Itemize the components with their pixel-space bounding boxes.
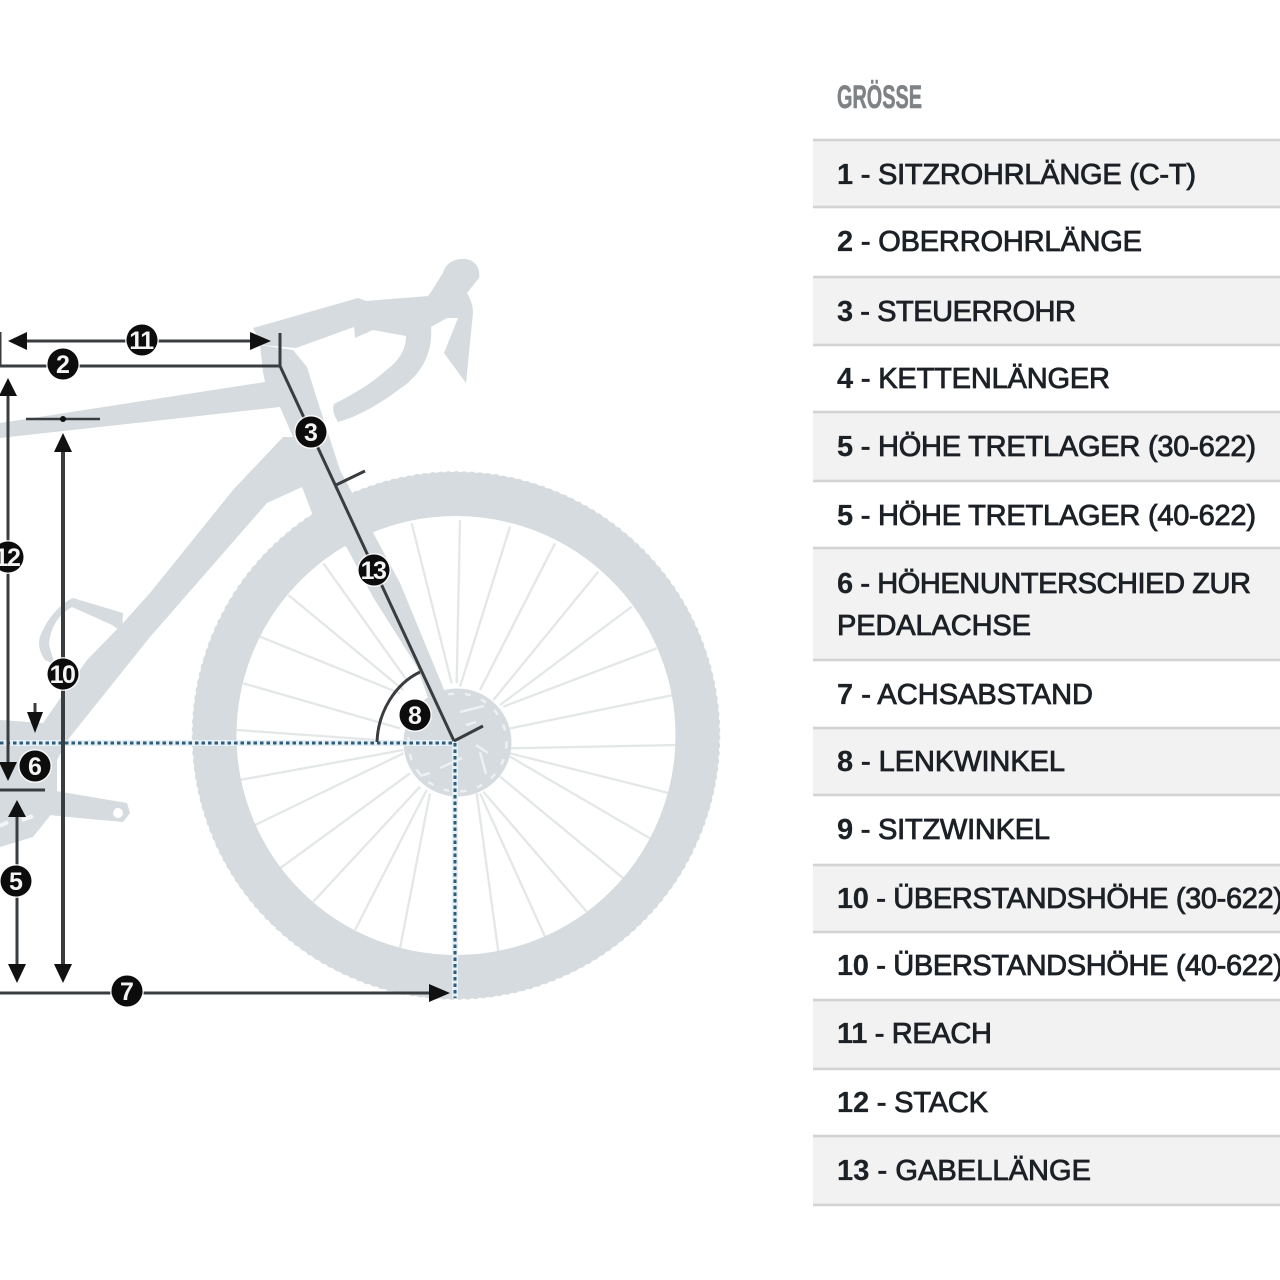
badge 13: 13 — [361, 557, 386, 585]
badge 2 — [46, 347, 80, 381]
badge 8 — [398, 698, 432, 732]
bottle cage — [39, 598, 123, 665]
dimension 11: reach — [0, 332, 280, 366]
row 4: 4 - KETTENLÄNGER — [837, 363, 1110, 395]
badge 10: 10 — [50, 661, 75, 689]
badge 6 — [18, 749, 52, 783]
row 8: 8 - LENKWINKEL — [837, 746, 1065, 778]
dotted reference lines — [0, 743, 455, 998]
badge 2: 2 — [56, 351, 70, 379]
dimension 3 and 13: head tube and fork — [280, 366, 483, 741]
badge 10 — [46, 657, 80, 691]
row 11: 11 - REACH — [837, 1018, 992, 1050]
badge 7: 7 — [120, 978, 134, 1006]
row 3: 3 - STEUERROHR — [837, 296, 1076, 328]
dimension 7: wheelbase — [0, 984, 450, 1002]
row 9: 9 - SITZWINKEL — [837, 814, 1050, 846]
badge 12 — [0, 540, 25, 574]
row 5a: 5 - HÖHE TRETLAGER (30-622) — [837, 431, 1256, 463]
row 12: 12 - STACK — [837, 1087, 989, 1119]
bike silhouette — [0, 259, 720, 999]
brake disc — [404, 688, 512, 796]
row 6 — [837, 568, 1251, 642]
table: geometry rows — [813, 139, 1280, 1206]
row 7: 7 - ACHSABSTAND — [837, 679, 1093, 711]
row 2: 2 - OBERROHRLÄNGE — [837, 226, 1142, 258]
heading: Größe: GRÖSSE — [837, 79, 922, 115]
crank and chainring — [0, 790, 130, 847]
badge 5: 5 — [9, 868, 23, 896]
handlebar — [253, 259, 479, 422]
badge 11 — [125, 323, 159, 357]
dimension 2: top tube — [0, 364, 280, 368]
badge 8: 8 — [408, 702, 422, 730]
measurement lines — [0, 332, 483, 1002]
dimension 6: arrow — [27, 703, 43, 733]
row 6: 6 - HÖHENUNTERSCHIED ZUR — [837, 568, 1251, 600]
row 5b: 5 - HÖHE TRETLAGER (40-622) — [837, 500, 1256, 532]
wheel spokes — [237, 520, 677, 952]
dimension 12: stack — [0, 378, 17, 781]
badge 11: 11 — [129, 327, 154, 355]
badge 3 — [294, 415, 328, 449]
number badges — [0, 323, 432, 1008]
row 6: PEDALACHSE — [837, 610, 1031, 642]
frame and fork — [0, 345, 458, 800]
badge 5 — [0, 864, 33, 898]
badge 6: 6 — [28, 753, 42, 781]
row 10a: 10 - ÜBERSTANDSHÖHE (30-622) — [837, 883, 1280, 915]
dimension 10: standover — [26, 416, 100, 983]
front tyre — [192, 472, 720, 999]
row 10b: 10 - ÜBERSTANDSHÖHE (40-622) — [837, 950, 1280, 982]
dimension 8: head angle arc — [377, 672, 420, 742]
badge 13 — [357, 553, 391, 587]
row 13: 13 - GABELLÄNGE — [837, 1155, 1091, 1187]
badge 7 — [110, 974, 144, 1008]
row 1: 1 - SITZROHRLÄNGE (C-T) — [837, 159, 1196, 191]
row backgrounds — [813, 141, 1280, 1205]
badge 3: 3 — [304, 419, 318, 447]
dimension 5: bottom bracket height — [0, 790, 45, 983]
